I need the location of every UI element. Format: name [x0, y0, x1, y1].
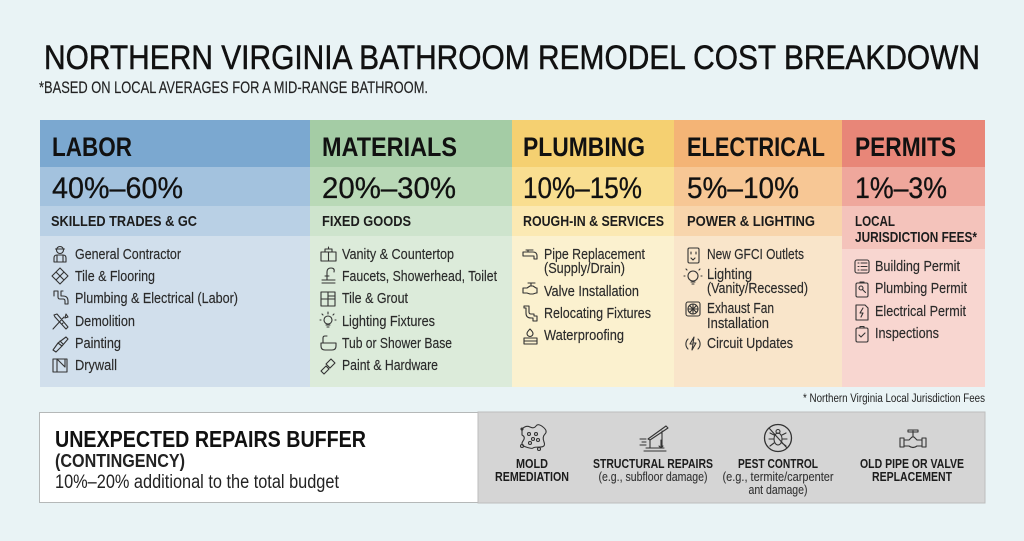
percentage: materials: 20%–30% — [322, 172, 456, 205]
item: paint and hardware — [321, 357, 438, 374]
example: mold remediation — [495, 425, 569, 484]
item: lighting — [684, 266, 808, 297]
subheading: permits: LOCAL — [855, 213, 895, 230]
item: lighting: Lighting — [707, 266, 752, 283]
item: circuit updates: Circuit Updates — [707, 335, 793, 352]
subheading: materials: FIXED GOODS — [322, 213, 411, 230]
item: gfci outlets: New GFCI Outlets — [707, 246, 804, 263]
item: pipe replacement: (Supply/Drain) — [544, 260, 625, 277]
item: tile and grout: Tile & Grout — [342, 290, 409, 307]
heading: permits: PERMITS — [855, 132, 956, 162]
percentage: permits: 1%–3% — [855, 172, 947, 205]
subheading: labor: SKILLED TRADES & GC — [51, 213, 197, 230]
item: valve installation: Valve Installation — [544, 283, 639, 300]
item: lighting fixtures — [320, 312, 435, 330]
item: building permit: Building Permit — [875, 258, 961, 275]
item: faucets: Faucets, Showerhead, Toilet — [342, 268, 498, 285]
panel: unexpected repairs buffer — [40, 412, 478, 502]
example: structural repairs — [593, 426, 713, 484]
percentage: labor: 40%–60% — [52, 172, 183, 205]
item: vanity: Vanity & Countertop — [342, 246, 454, 263]
item: exhaust fan: Installation — [707, 315, 769, 332]
panel: electrical — [674, 120, 842, 387]
example: mold remediation: REMEDIATION — [495, 469, 569, 484]
subheading: plumbing: ROUGH-IN & SERVICES — [523, 213, 664, 230]
item: plumbing permit: Plumbing Permit — [875, 280, 968, 297]
panel: materials — [310, 120, 512, 387]
item: tub — [321, 335, 452, 352]
item: demolition — [53, 313, 135, 330]
subheading: permits — [855, 213, 977, 246]
heading: plumbing: PLUMBING — [523, 132, 645, 162]
subheading: permits: JURISDICTION FEES* — [855, 229, 977, 246]
heading: buffer: UNEXPECTED REPAIRS BUFFER — [55, 426, 366, 452]
item: paint and hardware: Paint & Hardware — [342, 357, 438, 374]
example: old pipe or valve replacement: REPLACEMENT — [872, 469, 952, 484]
subheading: electrical: POWER & LIGHTING — [687, 213, 815, 230]
item: relocating fixtures: Relocating Fixtures — [544, 305, 651, 322]
example: pest control: PEST CONTROL — [738, 456, 818, 471]
example: mold remediation: MOLD — [516, 456, 548, 471]
item: exhaust fan — [686, 300, 774, 332]
item: painting — [53, 335, 121, 352]
item: painting: Painting — [75, 335, 121, 352]
item: circuit updates — [686, 335, 793, 352]
item: tile and grout — [321, 290, 409, 307]
heading: electrical: ELECTRICAL — [687, 132, 825, 162]
example: old pipe or valve replacement — [860, 430, 964, 484]
panel: labor — [40, 120, 310, 387]
example: pest control: (e.g., termite/carpenter — [722, 469, 834, 484]
item: gfci outlets — [688, 246, 804, 263]
item: drywall — [53, 357, 117, 374]
item: pipe replacement: Pipe Replacement — [544, 246, 646, 263]
example: pest control — [722, 424, 834, 497]
percentage: electrical: 5%–10% — [687, 172, 799, 205]
item: tub: Tub or Shower Base — [342, 335, 452, 352]
heading: materials: MATERIALS — [322, 132, 457, 162]
item: electrical permit: Electrical Permit — [875, 303, 967, 320]
subtitle: *BASED ON LOCAL AVERAGES FOR A MID-RANGE BATHROOM. — [39, 79, 428, 97]
item: inspections: Inspections — [875, 325, 939, 342]
example: old pipe or valve replacement: OLD PIPE OR VALVE — [860, 456, 964, 471]
item: demolition: Demolition — [75, 313, 135, 330]
footnote: * Northern Virginia Local Jurisdiction Fees — [803, 393, 985, 405]
description: buffer: 10%–20% additional to the total budget — [55, 472, 340, 493]
example: structural repairs: (e.g., subfloor damage) — [598, 469, 708, 484]
item: waterproofing: Waterproofing — [544, 327, 624, 344]
item: lighting fixtures: Lighting Fixtures — [342, 313, 435, 330]
example: pest control: ant damage) — [748, 482, 808, 497]
item: pipe replacement — [523, 246, 646, 277]
item: inspections — [856, 325, 939, 342]
item: general contractor: General Contractor — [75, 246, 181, 263]
example: structural repairs: STRUCTURAL REPAIRS — [593, 456, 713, 471]
item: plumbing and electrical: Plumbing & Electrical (Labor) — [75, 290, 238, 307]
panel: permits — [842, 120, 985, 387]
heading: labor: LABOR — [52, 132, 132, 162]
percentage: plumbing: 10%–15% — [523, 172, 642, 205]
item: exhaust fan: Exhaust Fan — [707, 300, 774, 317]
item: drywall: Drywall — [75, 357, 117, 374]
subheading: contingency: (CONTINGENCY) — [55, 451, 185, 471]
item: lighting: (Vanity/Recessed) — [707, 280, 808, 297]
panel: contingency examples — [478, 412, 985, 503]
panel: plumbing — [512, 120, 674, 387]
item: tile and flooring — [52, 268, 155, 285]
item: tile and flooring: Tile & Flooring — [75, 268, 155, 285]
